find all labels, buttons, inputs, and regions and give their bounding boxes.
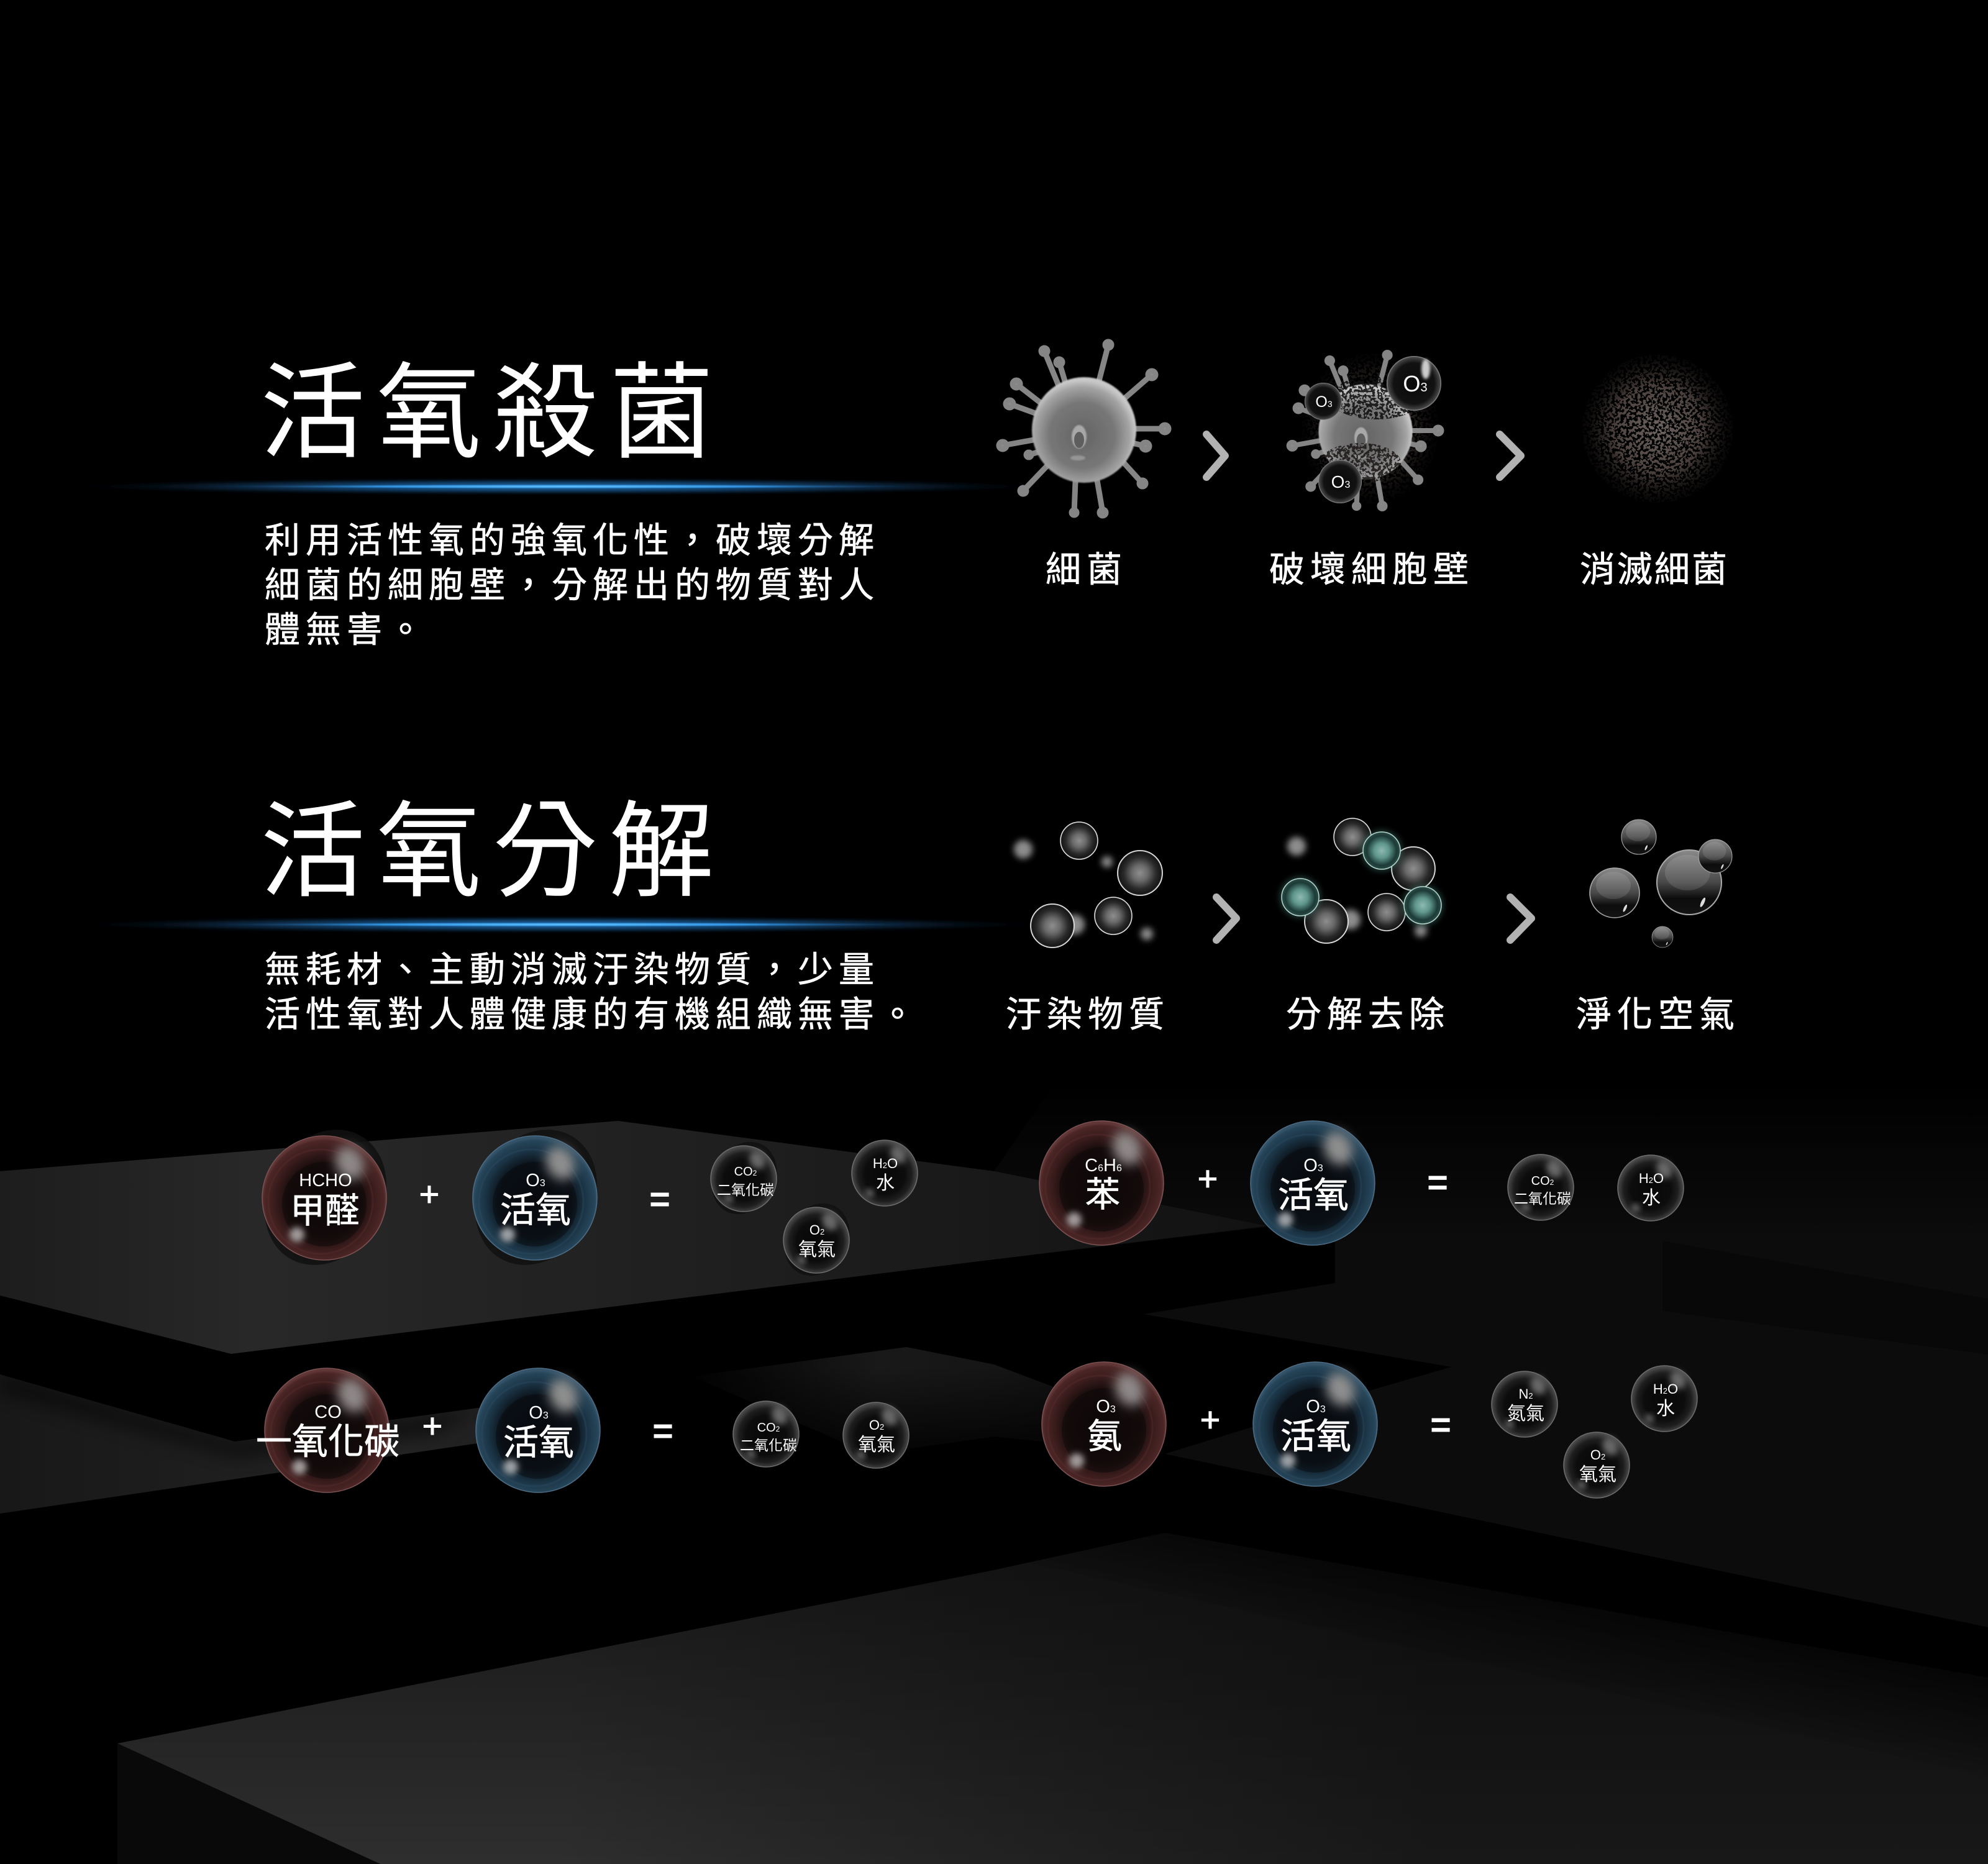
equals: = [649,1179,670,1220]
bubble: O3 [476,1368,600,1492]
glow divider 1 [75,478,1044,495]
bubble: CO2 [733,1401,799,1467]
step labels: decomposition: 淨化空氣 [1576,995,1740,1035]
equation: formaldehyde [240,1107,918,1287]
bubble: HCHO: 甲醛 [290,1191,360,1230]
description: 活氧殺菌: 利用活性氧的強氧化性，破壞分解 [265,521,880,560]
step labels: decomposition: 分解去除 [1286,995,1450,1035]
step labels: decomposition [1006,995,1740,1035]
bubble: CO2: 二氧化碳 [740,1437,797,1453]
step labels: sterilization: 消滅細菌 [1580,550,1729,590]
bubble: O2 [1564,1432,1630,1498]
process: decomposition icons [1014,818,1732,948]
heading: 活氧殺菌: 活氧殺菌 [260,354,725,472]
arrow 4 [1510,897,1531,940]
bubble: ammonia: O3 [1096,1397,1116,1417]
bubble: H2O [1618,1155,1684,1221]
equation: benzene [1039,1121,1684,1245]
bubble: CO: CO [314,1402,342,1422]
bubble: O2 [783,1207,849,1273]
bubble: large O3 [1387,356,1441,411]
icon: bacteria [999,342,1169,516]
bubble: ammonia: 氨 [1087,1417,1122,1456]
bubble: O3 [473,1136,597,1260]
bubble: H2O [1631,1366,1697,1432]
description: 活氧殺菌: 體無害。 [265,610,429,650]
bubble: ammonia [1042,1362,1166,1486]
bubble: bottom O3: O3 [1331,472,1350,491]
bubble: H2O: H2O [873,1156,898,1171]
bubble: CO2 [711,1146,777,1212]
bubble: CO2 [1508,1154,1574,1220]
equals: = [1427,1163,1448,1203]
arrow 3 [1216,897,1236,940]
bubble: H2O: 水 [876,1173,895,1194]
bubble: CO2: CO2 [757,1421,780,1435]
bubble: large O3: O3 [1403,371,1428,396]
bubble: H2O: 水 [1642,1188,1661,1208]
bubble: C6H6 [1039,1121,1164,1245]
bubble: O3: 活氧 [1280,1417,1351,1456]
icon: broken bacteria [1289,348,1443,509]
glow divider 2 [75,916,1044,933]
step labels: decomposition: 汙染物質 [1006,995,1170,1035]
bubble: O2: 氧氣 [1579,1464,1616,1485]
equation: carbon monoxide [256,1368,909,1492]
bubble: O2: O2 [869,1417,884,1433]
bubble: bottom O3 [1318,460,1362,503]
bubble: O3: 活氧 [503,1423,574,1463]
bubble: left O3: O3 [1315,393,1333,411]
bubble: HCHO [262,1136,386,1260]
bubble: H2O: H2O [1639,1171,1664,1186]
bubble: CO2: CO2 [734,1165,757,1179]
plus: + [1198,1159,1218,1198]
step labels: sterilization [1046,550,1729,590]
bubble: CO: 一氧化碳 [256,1422,400,1462]
bubble: H2O: H2O [1653,1381,1678,1397]
bubble: O3 [1253,1362,1377,1486]
bubble: N2 [1492,1371,1557,1437]
description: 活氧殺菌: 細菌的細胞壁，分解出的物質對人 [265,565,880,605]
bubble: O3: 活氧 [500,1190,571,1230]
bubble: C6H6: 苯 [1085,1175,1120,1214]
arrow 2 [1500,434,1521,477]
icon: pollutants [1014,822,1162,948]
plus: + [422,1406,442,1445]
heading: 活氧分解: 活氧分解 [260,793,725,910]
bubble: O3: 活氧 [1278,1176,1349,1215]
equation: ammonia [1042,1362,1697,1498]
icon: destroyed bacteria dust [1577,349,1738,508]
bubble: O3: O3 [1303,1156,1323,1176]
description: 活氧分解: 活性氧對人體健康的有機組織無害。 [265,995,921,1035]
bubble: CO2: 二氧化碳 [1514,1190,1571,1207]
bubble: O2 [843,1402,909,1468]
bubble: H2O [852,1140,918,1206]
bubble: O2: O2 [809,1222,824,1238]
step labels: sterilization: 細菌 [1046,550,1128,590]
bubble: O2: 氧氣 [798,1240,836,1260]
bubble: CO2: CO2 [1531,1174,1554,1188]
bubble: O3: O3 [526,1171,545,1190]
arrow 1 [1206,434,1225,477]
plus: + [419,1174,439,1213]
bubble: left O3 [1305,383,1342,420]
icon: decomposition [1280,818,1443,943]
bubble: H2O: 水 [1656,1399,1675,1419]
bubble: N2: N2 [1518,1386,1533,1402]
icon: clean air bubbles [1590,820,1732,948]
bubble: O2: O2 [1590,1447,1605,1463]
description: 活氧分解 [265,950,921,1035]
step labels: sterilization: 破壞細胞壁 [1269,550,1474,590]
equals: = [652,1411,673,1451]
bubble: N2: 氮氣 [1507,1404,1544,1424]
bubble: O3 [1251,1121,1375,1245]
plus: + [1200,1400,1220,1439]
bubble: CO [256,1368,400,1492]
bubble: HCHO: HCHO [299,1171,352,1190]
process: sterilization icons [999,342,1738,516]
background: stacked dark platforms [0,1081,1988,1864]
equals: = [1430,1405,1451,1445]
bubble: O3: O3 [1306,1397,1326,1417]
description: 活氧分解: 無耗材、主動消滅汙染物質，少量 [265,950,880,990]
bubble: CO2: 二氧化碳 [717,1182,774,1198]
bubble: O3: O3 [529,1403,549,1423]
bubble: C6H6: C6H6 [1085,1156,1122,1176]
description: 活氧殺菌 [265,521,880,650]
bubble: O2: 氧氣 [858,1435,895,1455]
